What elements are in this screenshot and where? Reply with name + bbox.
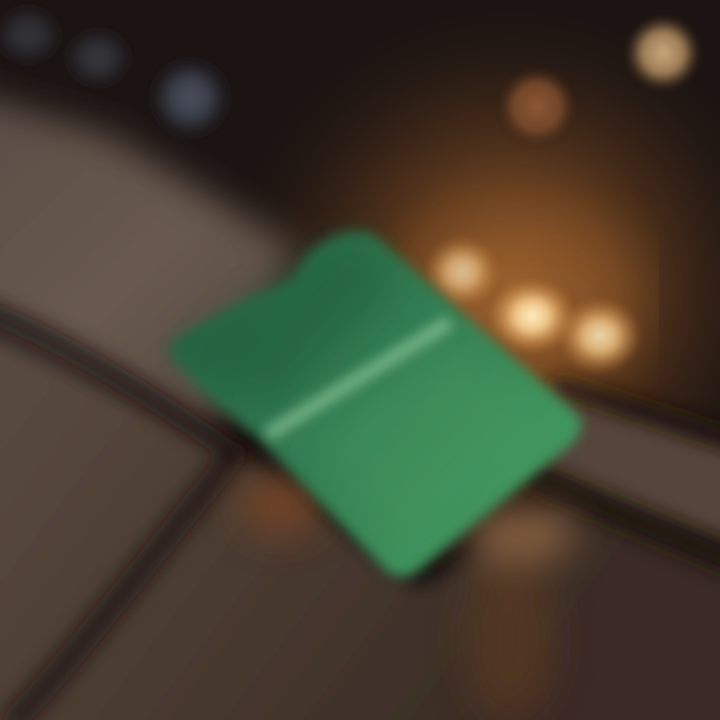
bokeh lights: top left blue — [0, 5, 230, 138]
green card — [168, 232, 581, 577]
card body — [168, 232, 581, 577]
card lower lit area — [300, 345, 555, 550]
bokeh lights: top right warm — [497, 15, 701, 147]
bright glowing lights — [410, 220, 650, 380]
card shaded upper left — [175, 239, 400, 410]
right table plank — [540, 385, 720, 550]
wooden table: upper left plank — [0, 90, 300, 440]
wooden table: lower surface — [0, 330, 720, 720]
card light stripe — [272, 325, 445, 432]
warm background glow — [150, 0, 720, 600]
warm reflection under the card — [238, 475, 575, 720]
dark plank gaps — [0, 312, 720, 720]
